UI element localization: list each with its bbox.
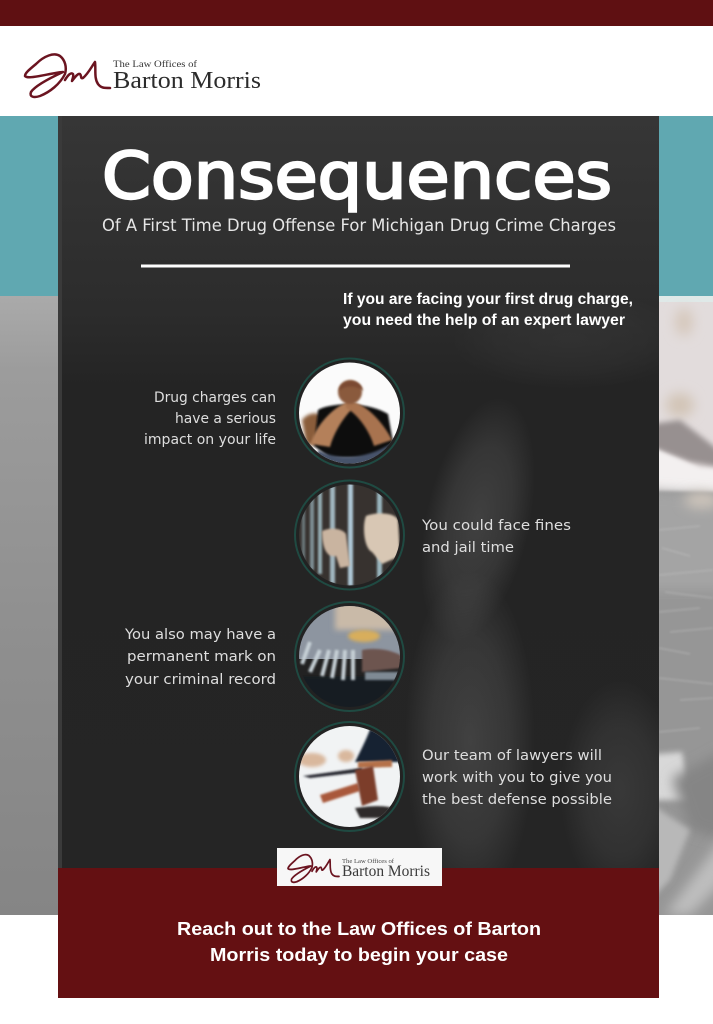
background photo: right side hand and hair bbox=[659, 296, 713, 915]
top maroon bar bbox=[0, 0, 713, 26]
panel: maroon call to action bbox=[58, 868, 659, 998]
title divider bbox=[141, 264, 570, 268]
intro text: you need the help of an expert lawyer bbox=[343, 312, 625, 329]
small logo badge: The Law Offices of bbox=[342, 858, 395, 865]
text: team of lawyers: work with you to give you bbox=[422, 770, 612, 786]
background band: teal bbox=[0, 116, 713, 296]
call to action text: Morris today to begin your case bbox=[210, 944, 508, 965]
background photo: left side grey bbox=[0, 296, 58, 915]
text: permanent criminal record: your criminal record bbox=[125, 672, 276, 688]
logo: The Law Offices of Barton Morris bbox=[25, 54, 261, 97]
text: team of lawyers: Our team of lawyers will bbox=[422, 748, 602, 764]
text: team of lawyers bbox=[422, 748, 612, 808]
icon: photo of hands on jail bars bbox=[295, 480, 404, 590]
small logo badge bbox=[277, 848, 442, 886]
subtitle: Of A First Time Drug Offense For Michigan Drug Crime Charges bbox=[102, 216, 616, 235]
text: serious impact bbox=[144, 390, 276, 448]
intro text bbox=[343, 291, 633, 329]
text: team of lawyers: the best defense possible bbox=[422, 792, 612, 808]
panel: dark main panel bbox=[58, 116, 690, 910]
text: serious impact: impact on your life bbox=[144, 432, 276, 448]
text: permanent criminal record bbox=[124, 627, 276, 688]
logo: The Law Offices of Barton Morris: The Law Offices of bbox=[113, 59, 198, 70]
icon: photo of distressed man bbox=[295, 358, 404, 470]
icon: photo of records files bbox=[295, 600, 405, 712]
text: fines and jail time: You could face fines bbox=[421, 518, 571, 534]
logo: The Law Offices of Barton Morris: Barton Morris bbox=[113, 68, 261, 94]
call to action text bbox=[177, 918, 541, 965]
text: fines and jail time bbox=[421, 518, 571, 556]
text: serious impact: have a serious bbox=[175, 411, 276, 427]
text: serious impact: Drug charges can bbox=[154, 390, 276, 406]
small logo badge: Barton Morris bbox=[342, 863, 430, 880]
text: permanent criminal record: permanent mark on bbox=[127, 649, 276, 665]
intro text: If you are facing your first drug charge, bbox=[343, 291, 633, 308]
call to action text: Reach out to the Law Offices of Barton bbox=[177, 918, 541, 939]
title: Consequences bbox=[102, 140, 612, 214]
icon: photo of judge gavel bbox=[295, 722, 404, 831]
text: fines and jail time: and jail time bbox=[422, 540, 514, 556]
text: permanent criminal record: You also may have a bbox=[124, 627, 276, 643]
